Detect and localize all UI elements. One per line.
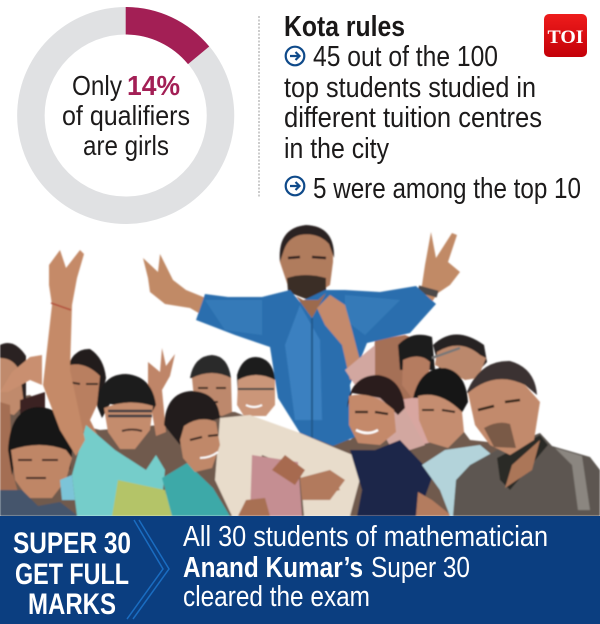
icon: double chevron — [127, 520, 169, 619]
donut label: Only — [72, 70, 122, 101]
icon: arrow bullet 1 — [286, 47, 304, 65]
text block: 45 out of the 100: different tuition centres — [284, 102, 542, 134]
donut label: of qualifiers — [62, 100, 190, 131]
donut label — [62, 70, 190, 161]
banner heading: SUPER 30 — [13, 527, 131, 560]
person: back right students — [372, 334, 487, 445]
banner text: Super 30 — [371, 552, 470, 584]
person: student with cap — [190, 355, 232, 416]
raised arm and hand — [43, 250, 85, 456]
person: small hand V — [148, 348, 175, 436]
person: far-left student (back) — [0, 343, 42, 500]
person: student in light blue shirt — [413, 368, 492, 516]
heading: Kota rules: Kota rules — [284, 11, 405, 43]
photo: Anand Kumar carried by students — [0, 225, 600, 516]
donut label: are girls — [83, 130, 169, 161]
right forearm and hand — [408, 232, 460, 312]
donut label: 14% — [127, 70, 180, 101]
person: Anand Kumar — [143, 225, 460, 446]
logo: TOI — [544, 14, 587, 57]
icon: arrow bullet 2 — [286, 177, 304, 195]
head — [280, 226, 333, 298]
person: smiling student in navy t-shirt — [300, 375, 452, 516]
donut segment: 14% — [126, 7, 209, 64]
banner text — [183, 521, 548, 613]
banner heading — [13, 527, 131, 621]
banner heading: GET FULL — [15, 558, 129, 591]
person: pink shirt behind — [345, 345, 425, 455]
text block: 45 out of the 100: top students studied in — [284, 72, 536, 104]
person: back student left — [20, 349, 106, 445]
banner text: Anand Kumar’s — [183, 552, 363, 584]
person: student with glasses and raised arm — [43, 250, 183, 516]
person: student with glasses behind — [237, 357, 275, 416]
donut chart: 14% girls — [31, 7, 220, 210]
blue shirt — [196, 286, 436, 446]
text block: 45 out of the 100 — [284, 41, 542, 165]
person: front-left student — [0, 407, 78, 516]
banner heading: MARKS — [28, 588, 116, 621]
dotted divider — [258, 16, 260, 197]
text block: 45 out of the 100: in the city — [284, 133, 389, 165]
person: student in teal t-shirt — [162, 391, 230, 516]
person: white trousers — [215, 415, 365, 516]
person: raised fist — [317, 295, 363, 380]
logo: TOI: TOI — [548, 27, 584, 48]
text block: 45 out of the 100: 45 out of the 100 — [313, 41, 498, 73]
banner text: All 30 students of mathematician — [183, 521, 548, 553]
crowd backing — [0, 395, 600, 516]
left forearm and hand — [143, 254, 218, 322]
panel: Super 30 banner — [0, 516, 600, 624]
person: man in grey polo — [453, 361, 600, 516]
banner text: cleared the exam — [183, 581, 370, 613]
